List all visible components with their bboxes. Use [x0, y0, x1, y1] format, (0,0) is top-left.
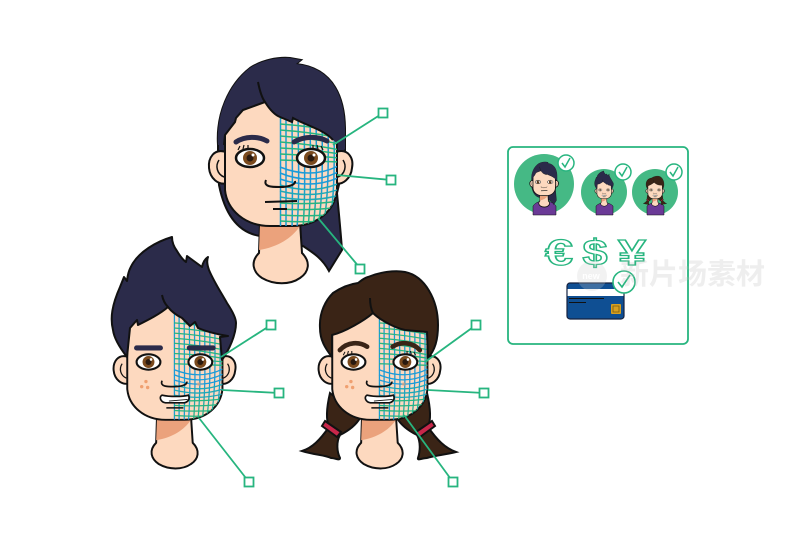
watermark: 新片场素材: [620, 258, 765, 291]
currency symbols: €: [545, 232, 573, 273]
currency symbols: ¥: [618, 232, 646, 273]
panel: verified payment: [508, 147, 688, 344]
currency symbols: [545, 232, 646, 273]
credit card: [567, 283, 624, 319]
head: woman with long dark hair and face mesh: [209, 58, 352, 283]
callout lines: woman: [318, 108, 396, 274]
currency symbols: $: [582, 232, 608, 273]
callout lines: girl: [404, 320, 488, 486]
woman eyebrows: [236, 137, 327, 142]
check badge: girl: [666, 164, 682, 180]
head: girl with brown pigtails and face mesh: [302, 271, 456, 468]
check badge: man: [615, 164, 631, 180]
avatar: girl: [632, 169, 678, 215]
woman mouth: [265, 201, 297, 209]
head: man with spiky hair and face mesh: [112, 237, 236, 468]
avatar: woman: [514, 154, 574, 215]
avatar: man: [581, 169, 627, 215]
girl eyebrows: [340, 343, 420, 350]
check badge: card: [613, 271, 635, 293]
watermark: new: [582, 271, 601, 281]
woman eyes: [236, 149, 325, 167]
man eyebrows: [137, 345, 213, 351]
check badge: woman: [558, 155, 574, 171]
callout lines: man: [199, 320, 284, 486]
